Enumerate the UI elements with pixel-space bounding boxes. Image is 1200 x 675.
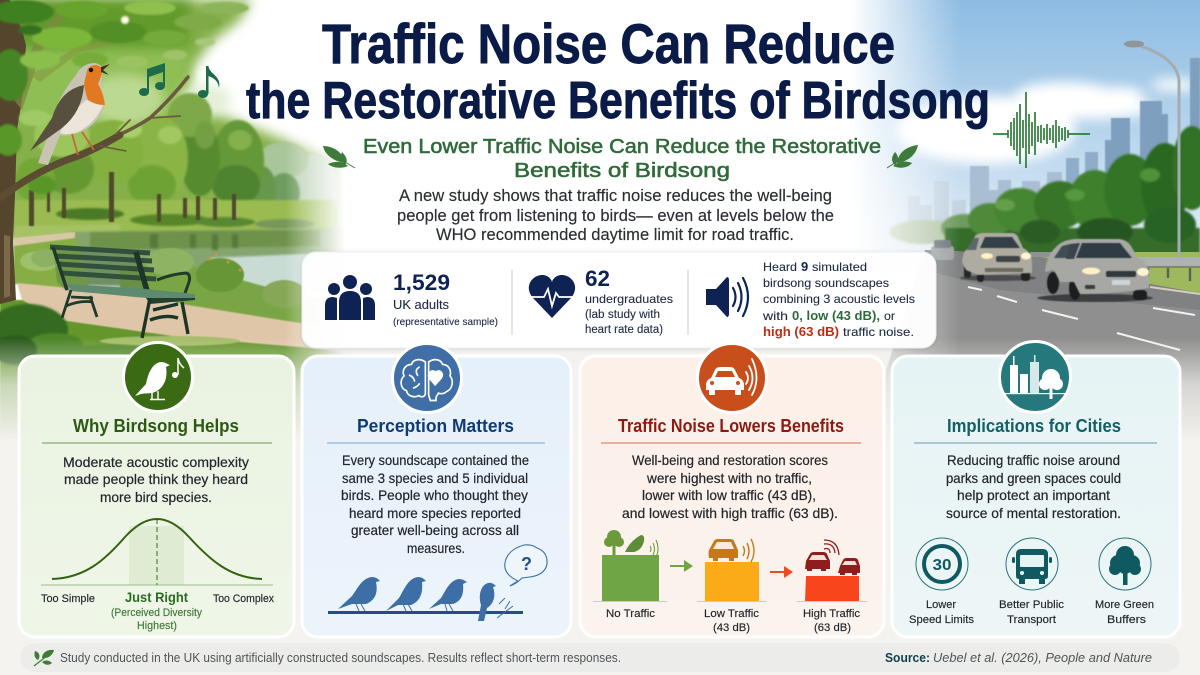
chart: complexity bell curve [41, 519, 273, 585]
distant tree crowns [16, 92, 338, 203]
body text [341, 452, 529, 556]
icon: city and tree [1000, 342, 1070, 412]
street lamp [1124, 40, 1179, 258]
chart labels: Too Simple [41, 593, 95, 605]
illustration: birds on a branch [328, 577, 523, 621]
intro text: A new study shows that traffic noise reduces the well-being [399, 186, 832, 205]
chart labels: No Traffic [606, 608, 656, 620]
subtitle: Benefits of Birdsong [514, 160, 730, 182]
car 1 [960, 233, 1036, 282]
icon: bird in circle [124, 342, 192, 412]
body text: lower with low traffic (43 dB), [642, 487, 816, 503]
body text: source of mental restoration. [946, 505, 1121, 521]
shrubs by the water [31, 248, 306, 308]
road [886, 250, 1200, 426]
icon: question bubble: ? [521, 554, 532, 574]
stat: undergraduates [585, 266, 673, 336]
title: the Restorative Benefits of Birdsong [246, 72, 990, 130]
illustration: robin singing [30, 63, 110, 165]
bar: low traffic [705, 539, 759, 601]
branch with robin perch [0, 77, 188, 198]
stat: soundscapes [762, 259, 915, 339]
title [246, 12, 990, 130]
intro text [397, 186, 834, 244]
chart labels: Low Traffic [704, 608, 760, 620]
bar: no traffic [602, 530, 659, 601]
panel: Why Birdsong Helps [19, 342, 294, 637]
icon: more green buffers [1095, 538, 1154, 626]
roadside trees [889, 126, 1200, 258]
icon: better public transport [999, 538, 1065, 626]
icon: lower speed limits: 30 [932, 557, 952, 574]
icon: lower speed limits: Lower [926, 599, 956, 611]
icon: more green buffers: Buffers [1107, 614, 1147, 626]
distant car [931, 240, 954, 260]
chart labels [606, 608, 861, 634]
body text [622, 452, 838, 521]
chart labels: High Traffic [803, 608, 861, 620]
stat: soundscapes: 0, low (43 dB), [792, 309, 880, 323]
subtitle [363, 136, 881, 182]
icon: music notes [139, 63, 219, 98]
intro text: people get from listening to birds— even at levels below the [397, 206, 834, 225]
scene: city road with skyline [858, 0, 1200, 426]
distant tree trunks [29, 172, 236, 226]
lower page tone [0, 345, 1200, 675]
guard rail [1030, 252, 1200, 281]
icon: left leaf [323, 146, 355, 168]
panel: study facts [302, 252, 936, 348]
body text: made people think they heard [64, 471, 248, 487]
icon: better public transport: Better Public [999, 599, 1065, 611]
stat: undergraduates: undergraduates [585, 292, 673, 306]
body text: same 3 species and 5 individual [342, 470, 528, 486]
stat: soundscapes: traffic noise. [843, 325, 914, 339]
skyline [908, 58, 1200, 236]
heading: Why Birdsong Helps [73, 416, 239, 436]
icon: lower speed limits [909, 538, 975, 626]
icon: better public transport: Transport [1007, 614, 1056, 626]
body text: Every soundscape contained the [342, 452, 529, 468]
stat: soundscapes: birdsong soundscapes [763, 276, 889, 290]
fade between scene and cards [0, 338, 1200, 443]
meadow, path and foreground grass [0, 232, 345, 450]
body text: more bird species. [100, 489, 212, 505]
bar: high traffic [805, 540, 860, 601]
icon: more green buffers: More Green [1095, 599, 1154, 611]
road verge [1030, 252, 1200, 293]
icon: lower speed limits: Speed Limits [909, 614, 975, 626]
source: Uebel et al. (2026), People and Nature [933, 651, 1152, 665]
lane markings [968, 287, 1200, 350]
car 2 [1037, 239, 1153, 302]
foreground leaves [0, 304, 155, 365]
body text: and lowest with high traffic (63 dB). [622, 505, 838, 521]
arrow: green [670, 560, 693, 572]
body text [63, 454, 249, 505]
body text: birds. People who thought they [341, 487, 528, 503]
body text: measures. [407, 540, 465, 556]
body text: parks and green spaces could [946, 470, 1121, 486]
heading: Implications for Cities [947, 416, 1121, 436]
body text: Well-being and restoration scores [632, 452, 828, 468]
scene: park with bench and lake [0, 0, 345, 450]
icon: question bubble [505, 545, 547, 586]
panel: Traffic Noise Lowers Benefits [580, 344, 884, 637]
panel: Implications for Cities [892, 342, 1180, 637]
icon: right leaf [887, 145, 918, 168]
icon: speaker [706, 277, 748, 317]
chart: benefit by traffic level [593, 530, 867, 602]
stat: UK adults: (representative sample) [393, 316, 498, 328]
lake [70, 228, 345, 292]
icon: people [325, 275, 375, 320]
icon: sound wave [993, 92, 1090, 168]
stat: soundscapes: or [884, 309, 895, 323]
lawn and shore [14, 200, 334, 238]
stat: UK adults: 1,529 [393, 270, 450, 295]
chart labels: Just Right [125, 589, 188, 605]
stat: soundscapes: simulated [812, 260, 867, 274]
foliage and tree base [0, 0, 345, 240]
arrow: red [770, 566, 793, 578]
chart labels: (Perceived Diversity [111, 607, 202, 619]
footnote: Study conducted in the UK using artificially constructed soundscapes. Results reflect short-term responses. [60, 651, 621, 665]
body text: greater well-being across all [351, 522, 519, 538]
bench [50, 247, 195, 338]
stat: soundscapes: 9 [801, 259, 808, 274]
heading: Traffic Noise Lowers Benefits [618, 416, 844, 436]
chart labels: Highest) [137, 620, 177, 632]
clouds [895, 79, 1199, 164]
stat: soundscapes: with [762, 309, 788, 323]
panel: Perception Matters [302, 344, 571, 637]
foreground tree trunk [0, 0, 115, 304]
chart labels: (63 dB) [814, 622, 851, 634]
stat: soundscapes: Heard [763, 260, 797, 274]
icon: footer leaf [34, 650, 54, 666]
body text: heard more species reported [349, 505, 521, 521]
stat: undergraduates: heart rate data) [585, 324, 663, 336]
stat: soundscapes: high (63 dB) [763, 325, 839, 339]
chart labels: Too Complex [213, 593, 274, 605]
body text: help protect an important [957, 487, 1110, 503]
body text: Reducing traffic noise around [947, 452, 1120, 468]
subtitle: Even Lower Traffic Noise Can Reduce the Restorative [363, 136, 881, 158]
stat: UK adults [393, 270, 498, 328]
source: Source: [885, 651, 930, 665]
title: Traffic Noise Can Reduce [322, 12, 895, 75]
stat: UK adults: UK adults [393, 297, 449, 312]
stat: undergraduates: (lab study with [585, 309, 660, 321]
chart labels [41, 589, 274, 632]
lower page cover [0, 443, 1200, 675]
icon: noisy car [698, 344, 766, 412]
stat: undergraduates: 62 [585, 266, 610, 291]
stat: soundscapes: combining 3 acoustic levels [763, 292, 915, 306]
icon: brain with heart [392, 344, 462, 412]
heading: Perception Matters [357, 416, 514, 436]
body text [946, 452, 1121, 521]
intro text: WHO recommended daytime limit for road traffic. [436, 225, 794, 244]
footer bar [20, 643, 1180, 672]
icon: heart with pulse [529, 275, 575, 318]
body text: were highest with no traffic, [646, 470, 812, 486]
body text: Moderate acoustic complexity [63, 454, 249, 470]
canopy leaf clusters [0, 0, 249, 194]
chart labels: (43 dB) [713, 622, 750, 634]
